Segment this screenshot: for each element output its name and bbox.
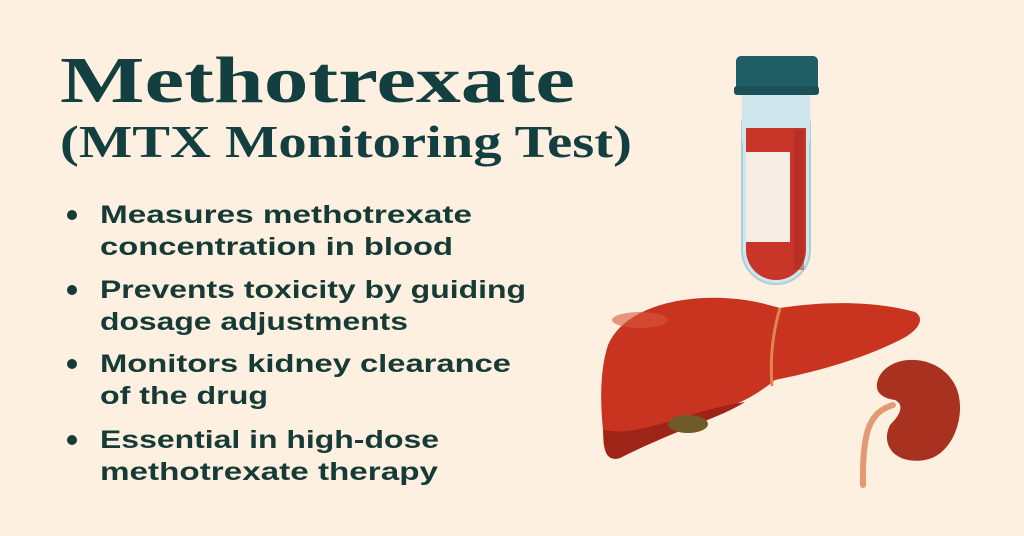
bullet 3: Monitors kidney clearance — [100, 350, 511, 378]
bullet 4: Essential in high-dose — [100, 426, 439, 454]
bullet 2 — [67, 276, 526, 336]
bullet 1: concentration in blood — [100, 233, 453, 261]
bullet 3 — [67, 350, 511, 410]
title — [60, 44, 632, 167]
icon: liver — [601, 298, 920, 459]
bullet list — [67, 201, 526, 486]
bullet 4: methotrexate therapy — [100, 458, 438, 486]
bullet 2: dosage adjustments — [100, 308, 408, 336]
title: Methotrexate — [60, 44, 575, 117]
bullet 2: Prevents toxicity by guiding — [100, 276, 526, 304]
subtitle: (MTX Monitoring Test) — [60, 116, 632, 167]
bullet 4 — [67, 426, 439, 486]
icon: kidney — [863, 360, 960, 485]
bullet 1 — [67, 201, 472, 261]
bullet 1: Measures methotrexate — [100, 201, 472, 229]
icon: blood test tube — [734, 56, 819, 284]
bullet 3: of the drug — [100, 382, 268, 410]
